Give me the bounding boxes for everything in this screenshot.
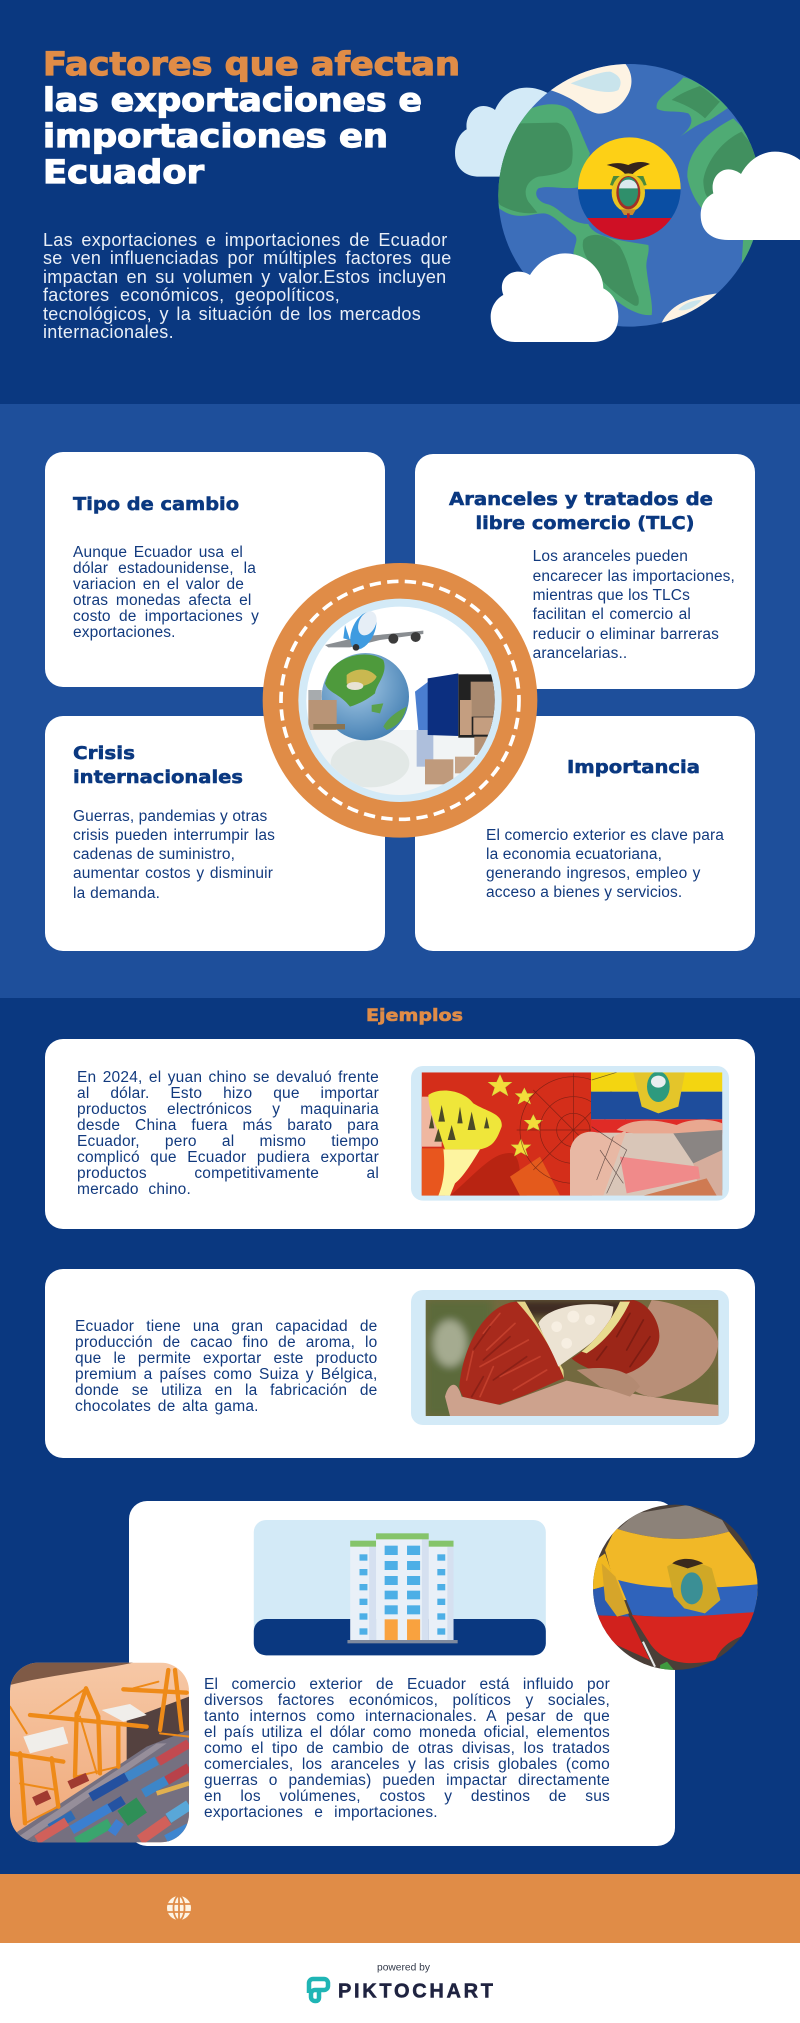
intro text: factores económicos, geopolíticos, [43, 285, 340, 305]
logo: Piktochart: PIKTOCHART [338, 1980, 493, 2002]
text: conclusion: tanto internos como internacionales. A pesar de que [204, 1708, 610, 1725]
text: ejemplo yuan: desde China fuera más barato para [77, 1117, 379, 1134]
text: ejemplo yuan [77, 1069, 379, 1198]
text: conclusion: diversos factores económicos, políticos y sociales, [204, 1692, 610, 1709]
text: Aranceles: encarecer las importaciones, [533, 568, 735, 585]
text: Importancia: generando ingresos, empleo y [486, 865, 700, 882]
text: conclusion: exportaciones e importaciones. [204, 1804, 438, 1821]
illustration: globe with Ecuador flag and clouds [455, 64, 800, 342]
text: Crisis: crisis pueden interrumpir las [73, 827, 275, 844]
heading: Tipo de cambio: Tipo de cambio [73, 494, 239, 515]
text: Importancia: El comercio exterior es clave para [486, 827, 724, 844]
text: ejemplo cacao: Ecuador tiene una gran capacidad de [75, 1318, 378, 1335]
title line: las exportaciones e: las exportaciones e [43, 81, 422, 119]
card: conclusion [129, 1501, 675, 1846]
text: Aranceles: arancelarias.. [533, 645, 627, 662]
text: ejemplo yuan: al dólar. Esto hizo que importar [77, 1085, 379, 1102]
text: Tipo de cambio: variacion en el valor de [73, 576, 244, 593]
text: conclusion: como el tipo de cambio de otras divisas, los tratados [204, 1740, 610, 1757]
text: ejemplo cacao: que le permite exportar este producto [75, 1350, 378, 1367]
text: ejemplo cacao [75, 1318, 378, 1415]
photos: China-Ecuador collage and cacao pod [411, 1066, 729, 1425]
card: ejemplo yuan [45, 1039, 755, 1229]
text: Aranceles: facilitan el comercio al [533, 606, 691, 623]
text: Tipo de cambio: exportaciones. [73, 624, 176, 641]
text: Tipo de cambio: dólar estadounidense, la [73, 560, 256, 577]
photo: port with cranes and containers [10, 1662, 189, 1842]
text: Importancia [486, 827, 724, 901]
text: conclusion: comerciales, los aranceles y las crisis globales (como [204, 1756, 610, 1773]
text: Aranceles: reducir o eliminar barreras [533, 626, 719, 643]
text: conclusion: en los volúmenes, costos y destinos de sus [204, 1788, 610, 1805]
text: Crisis [73, 808, 275, 902]
footer band [0, 1874, 800, 1943]
title line: Factores que afectan: Factores que afectan [43, 45, 460, 83]
intro text [43, 230, 452, 342]
text: ejemplo yuan: productos competitivamente al [77, 1165, 379, 1182]
text: Crisis: cadenas de suministro, [73, 846, 235, 863]
text: conclusion: guerras o pandemias) pueden impactar directamente [204, 1772, 610, 1789]
illustration: building and Ecuador flag photo [254, 1504, 758, 1670]
text: ejemplo cacao: producción de cacao fino de aroma, lo [75, 1334, 378, 1351]
heading: Importancia: Importancia [567, 757, 700, 778]
card: Importancia [415, 716, 755, 951]
text: ejemplo cacao: chocolates de alta gama. [75, 1398, 259, 1415]
title line: importaciones en: importaciones en [43, 117, 388, 155]
card: Tipo de cambio [45, 452, 385, 687]
text: conclusion [204, 1676, 610, 1821]
headings: title and card titles [43, 45, 713, 788]
text: Aranceles: Los aranceles pueden [533, 548, 688, 565]
text: conclusion: El comercio exterior de Ecuador está influido por [204, 1676, 610, 1693]
card: Aranceles y tratados [415, 454, 755, 689]
text: ejemplo yuan: mercado chino. [77, 1181, 191, 1198]
icon: web globe [167, 1896, 191, 1920]
text: ejemplo yuan: productos electrónicos y maquinaria [77, 1101, 379, 1118]
intro text: se ven influenciadas por múltiples factores que [43, 248, 452, 268]
card: Crisis internacionales [45, 716, 385, 951]
heading: Aranceles line 2: libre comercio (TLC) [476, 513, 694, 534]
footer white area [0, 1943, 800, 2023]
intro text: impactan en su volumen y valor.Estos incluyen [43, 267, 446, 287]
text: conclusion: el país utiliza el dólar como moneda oficial, elementos [204, 1724, 610, 1741]
center ring with trade photo [262, 563, 538, 838]
text: Crisis: aumentar costos y disminuir [73, 865, 273, 882]
text: Aranceles: mientras que los TLCs [533, 587, 690, 604]
intro text: tecnológicos, y la situación de los mercados [43, 304, 421, 324]
text: ejemplo cacao: premium a países como Suiza y Bélgica, [75, 1366, 378, 1383]
heading: Aranceles line 1: Aranceles y tratados de [449, 489, 713, 510]
heading: internacionales: internacionales [73, 767, 243, 788]
text: Tipo de cambio: Aunque Ecuador usa el [73, 544, 243, 561]
text: ejemplo cacao: donde se utiliza en la fabricación de [75, 1382, 378, 1399]
text: Importancia: la economia ecuatoriana, [486, 846, 662, 863]
text: powered by: powered by [377, 1963, 430, 1974]
heading: Ejemplos: Ejemplos [366, 1006, 463, 1026]
text: Aranceles [532, 548, 735, 662]
band: factors section background [0, 404, 800, 998]
text: Crisis: la demanda. [73, 885, 160, 902]
card: ejemplo cacao [45, 1269, 755, 1458]
intro text: internacionales. [43, 322, 174, 342]
title line: Ecuador: Ecuador [43, 153, 204, 191]
text: ejemplo yuan: En 2024, el yuan chino se devaluó frente [77, 1069, 379, 1086]
text: ejemplo yuan: Ecuador, pero al mismo tiempo [77, 1133, 379, 1150]
text: Importancia: acceso a bienes y servicios. [486, 884, 682, 901]
text: Crisis: Guerras, pandemias y otras [73, 808, 267, 825]
heading: Crisis: Crisis [73, 743, 135, 764]
intro text: Las exportaciones e importaciones de Ecuador [43, 230, 448, 250]
logo: Piktochart [306, 1976, 493, 2004]
text: ejemplo yuan: complicó que Ecuador pudiera exportar [77, 1149, 379, 1166]
text: Tipo de cambio: otras monedas afecta el [73, 592, 252, 609]
text: Tipo de cambio: costo de importaciones y [73, 608, 259, 625]
text: Tipo de cambio [73, 544, 259, 641]
